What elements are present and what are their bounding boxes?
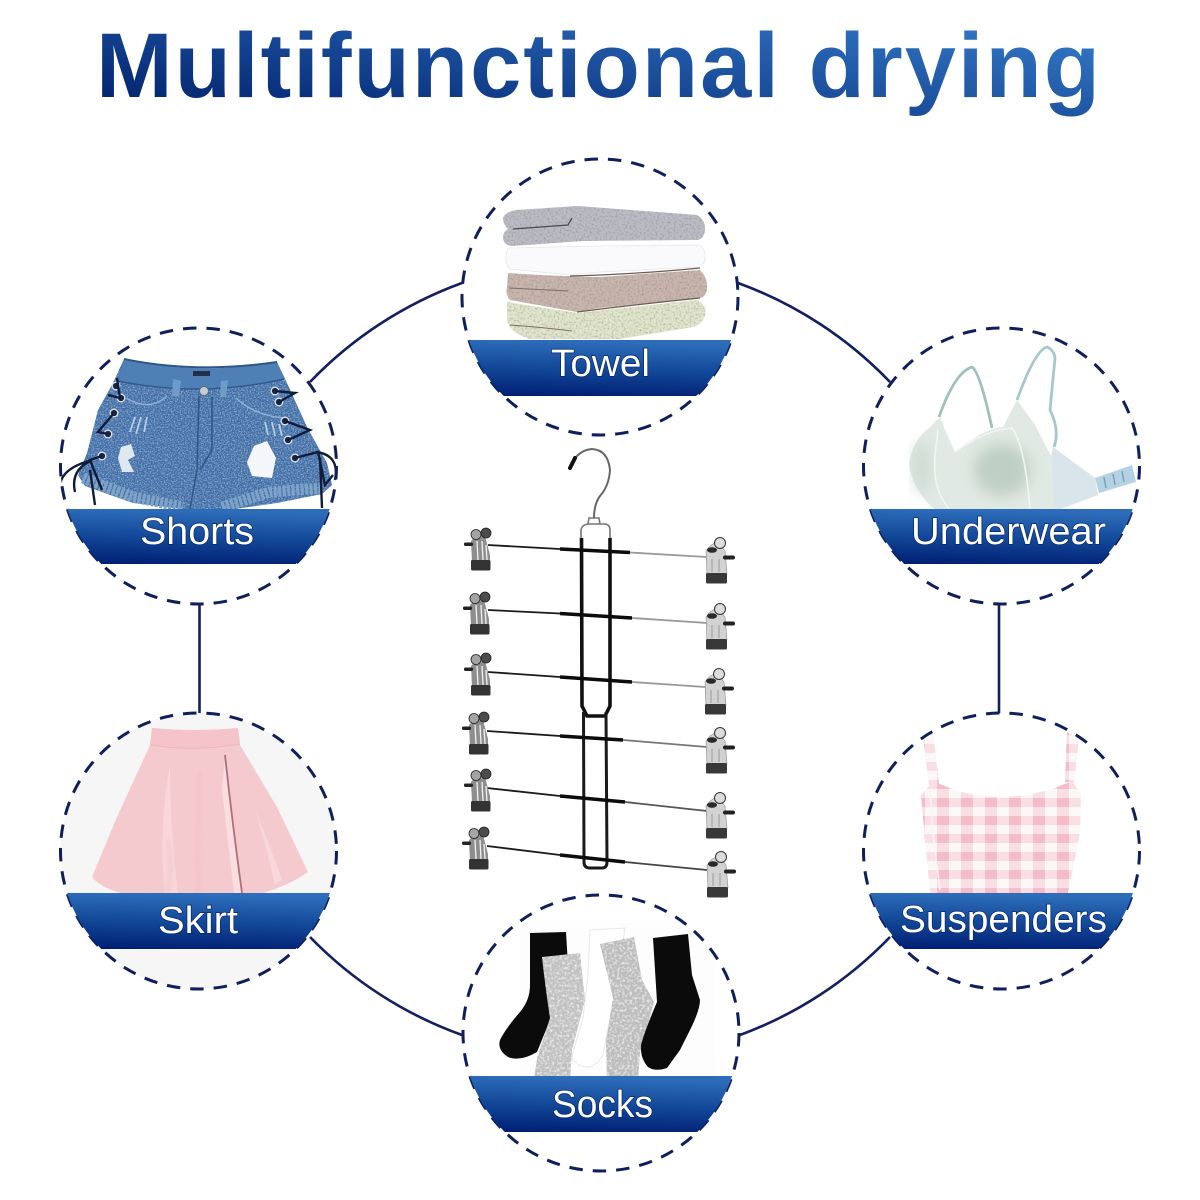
bra image bbox=[909, 347, 1136, 512]
dashed ring bbox=[462, 159, 738, 435]
label banner bbox=[861, 893, 1143, 949]
title: Multifunctional drying bbox=[96, 15, 1100, 117]
dashed ring bbox=[60, 328, 336, 604]
top bracket bbox=[581, 518, 610, 540]
panel: socks bbox=[461, 895, 741, 1171]
socks image bbox=[499, 928, 700, 1076]
label banner bbox=[58, 893, 340, 949]
dashed ring bbox=[864, 328, 1140, 604]
dashed ring bbox=[864, 713, 1140, 989]
right clips bbox=[705, 538, 736, 898]
label: Suspenders bbox=[900, 899, 1107, 941]
gingham top image bbox=[921, 732, 1081, 893]
pink skirt image bbox=[92, 728, 308, 893]
label banner bbox=[461, 1076, 741, 1132]
panel: shorts bbox=[58, 328, 340, 604]
left clips bbox=[462, 528, 491, 870]
center hanger illustration bbox=[462, 449, 736, 898]
panel: suspenders bbox=[861, 713, 1143, 989]
label banner bbox=[861, 509, 1143, 564]
label banner bbox=[58, 509, 340, 564]
panel: underwear bbox=[861, 328, 1143, 604]
lower frame bbox=[584, 712, 607, 868]
hook bbox=[570, 449, 610, 518]
connecting ring bbox=[200, 283, 999, 1035]
upper frame bbox=[582, 538, 610, 716]
panel: towel bbox=[460, 159, 740, 435]
label: Skirt bbox=[158, 900, 238, 942]
rods bbox=[487, 545, 707, 870]
label: Underwear bbox=[911, 511, 1106, 553]
denim shorts image bbox=[60, 359, 336, 509]
dashed ring bbox=[463, 895, 739, 1171]
label: Socks bbox=[552, 1084, 653, 1126]
panel: skirt bbox=[58, 713, 340, 989]
label banner bbox=[460, 340, 740, 396]
dashed ring bbox=[60, 713, 336, 989]
towel stack image bbox=[503, 206, 707, 339]
label: Towel bbox=[551, 343, 650, 385]
label: Shorts bbox=[140, 511, 254, 553]
